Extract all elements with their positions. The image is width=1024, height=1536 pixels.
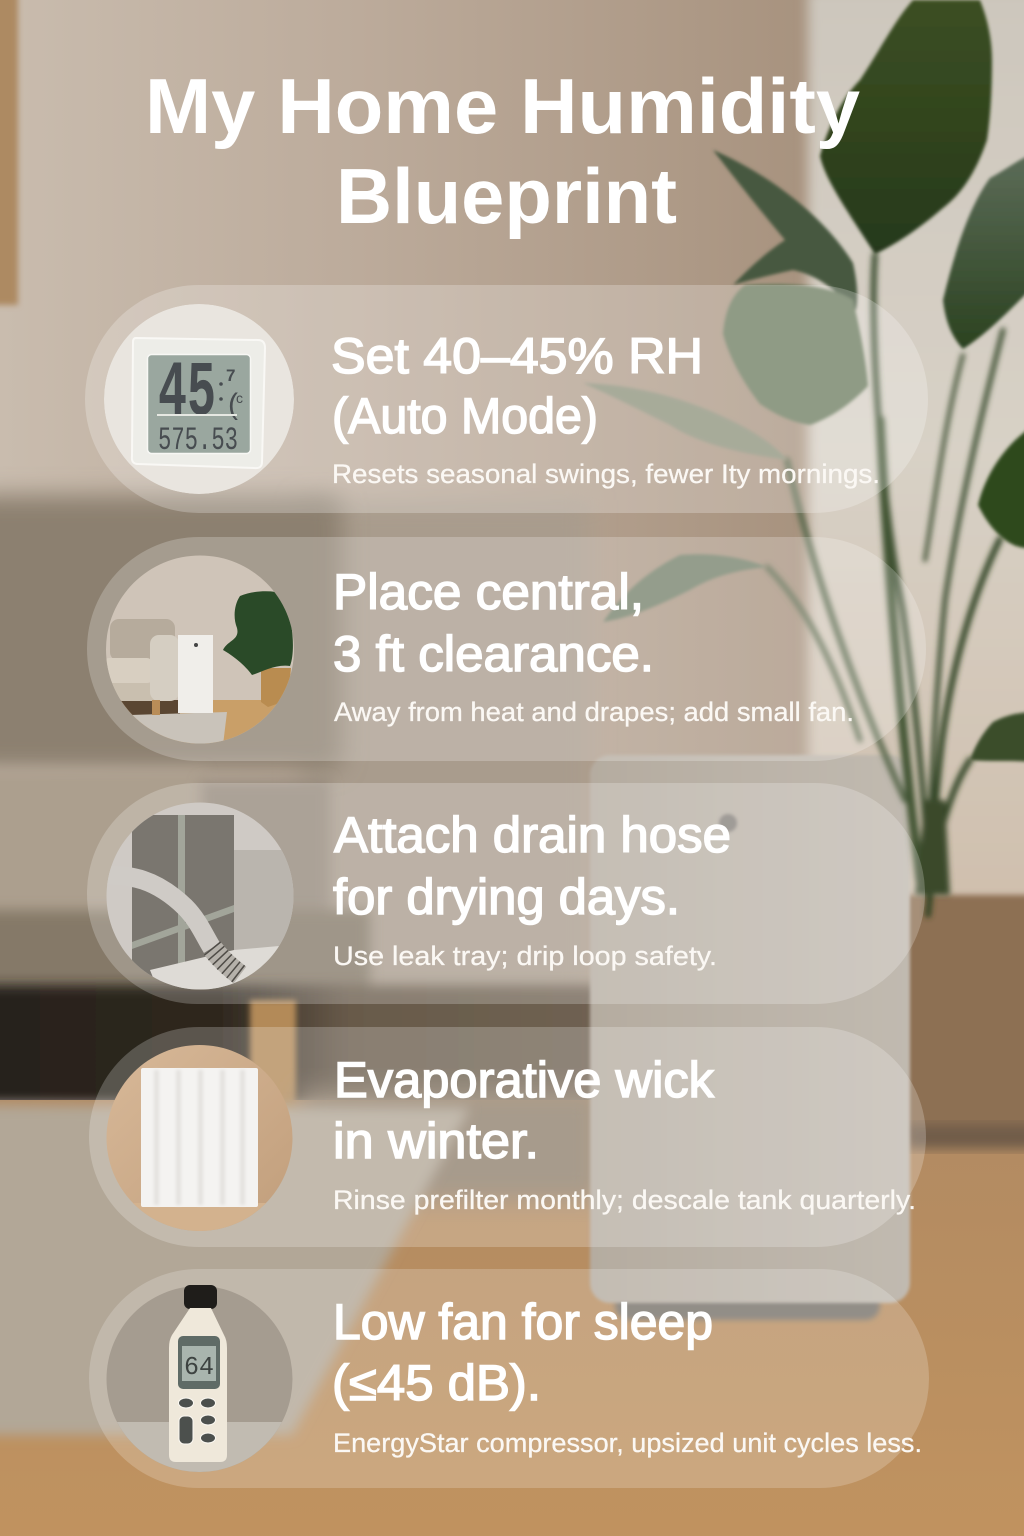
heading: Set 40–45% RH (331, 328, 703, 384)
heading line 2: in winter. (333, 1113, 539, 1169)
heading line 2: (≤45 dB). (332, 1355, 541, 1411)
icon: digital hygrometer: 45 (158, 350, 216, 438)
panel: set humidity (85, 285, 928, 513)
description: EnergyStar compressor, upsized unit cycles less. (333, 1428, 922, 1458)
title: Blueprint (336, 152, 677, 240)
heading line 2: for drying days. (333, 869, 680, 925)
heading line 2: (Auto Mode) (332, 388, 598, 444)
heading line 2: 3 ft clearance. (333, 626, 654, 682)
icon: sound level meter (106, 1285, 292, 1472)
panel: drain hose (87, 783, 925, 1004)
heading: Attach drain hose (334, 807, 731, 863)
heading: Place central, (333, 564, 644, 620)
icon: room with dehumidifier (106, 556, 294, 744)
icon: sound level meter: 64 (184, 1352, 214, 1382)
heading: Low fan for sleep (333, 1294, 713, 1350)
title: My Home Humidity (145, 62, 860, 150)
icon: digital hygrometer: 7 (226, 366, 235, 385)
description: Away from heat and drapes; add small fan. (334, 697, 854, 727)
icon: white wick filter (106, 1045, 292, 1231)
icon: digital hygrometer: c (236, 390, 243, 406)
panel: low fan noise (89, 1269, 929, 1488)
panel: evaporative wick (89, 1027, 926, 1247)
panel: placement (87, 537, 926, 761)
description: Use leak tray; drip loop safety. (333, 941, 717, 971)
icon: drain hose (106, 802, 294, 990)
icon: digital hygrometer: ( (228, 388, 238, 421)
title (145, 62, 860, 240)
icon: digital hygrometer: 575.53 (158, 422, 238, 459)
heading: Evaporative wick (334, 1052, 715, 1108)
icon: digital hygrometer (104, 304, 294, 494)
description: Resets seasonal swings, fewer Ity mornings. (332, 459, 880, 489)
description: Rinse prefilter monthly; descale tank quarterly. (333, 1185, 916, 1215)
